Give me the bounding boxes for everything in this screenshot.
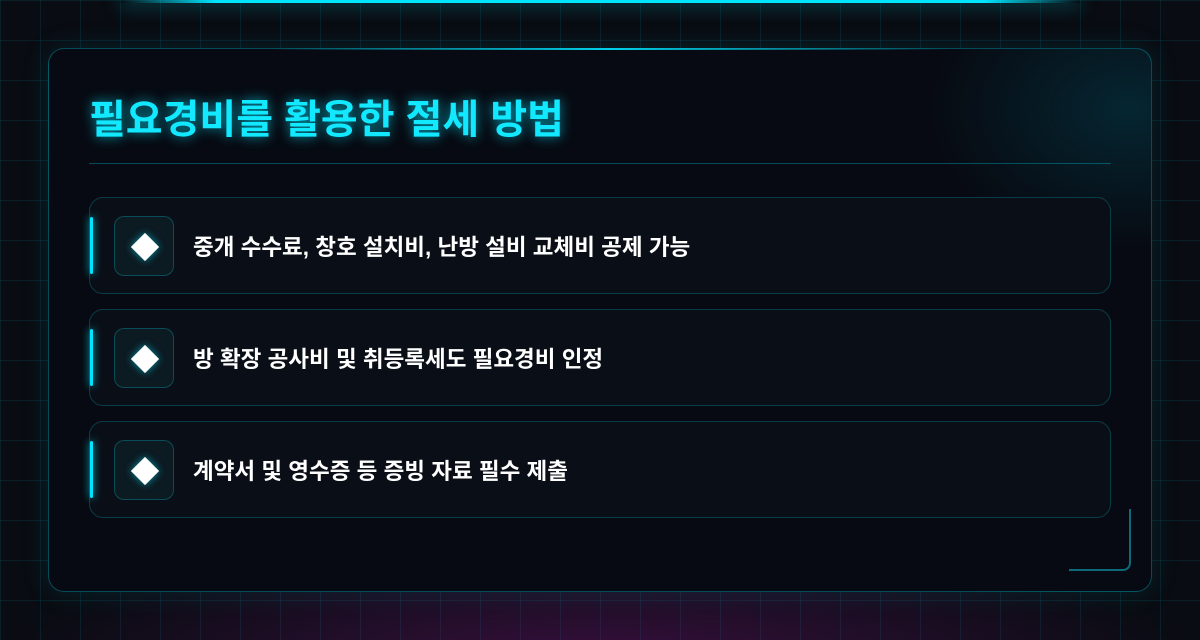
text 2: 방 확장 공사비 및 취등록세도 필요경비 인정 bbox=[193, 347, 603, 372]
item 1 bbox=[89, 197, 1111, 294]
item 2 bbox=[89, 309, 1111, 406]
icon: diamond bbox=[114, 328, 174, 388]
panel: main card bbox=[48, 48, 1152, 592]
corner bracket bbox=[1069, 509, 1131, 571]
icon: diamond bbox=[114, 440, 174, 500]
text 1: 중개 수수료, 창호 설치비, 난방 설비 교체비 공제 가능 bbox=[193, 235, 690, 260]
item 3 bbox=[89, 421, 1111, 518]
icon: diamond bbox=[114, 216, 174, 276]
title: 필요경비를 활용한 절세 방법 bbox=[89, 98, 564, 142]
text 3: 계약서 및 영수증 등 증빙 자료 필수 제출 bbox=[193, 459, 568, 484]
